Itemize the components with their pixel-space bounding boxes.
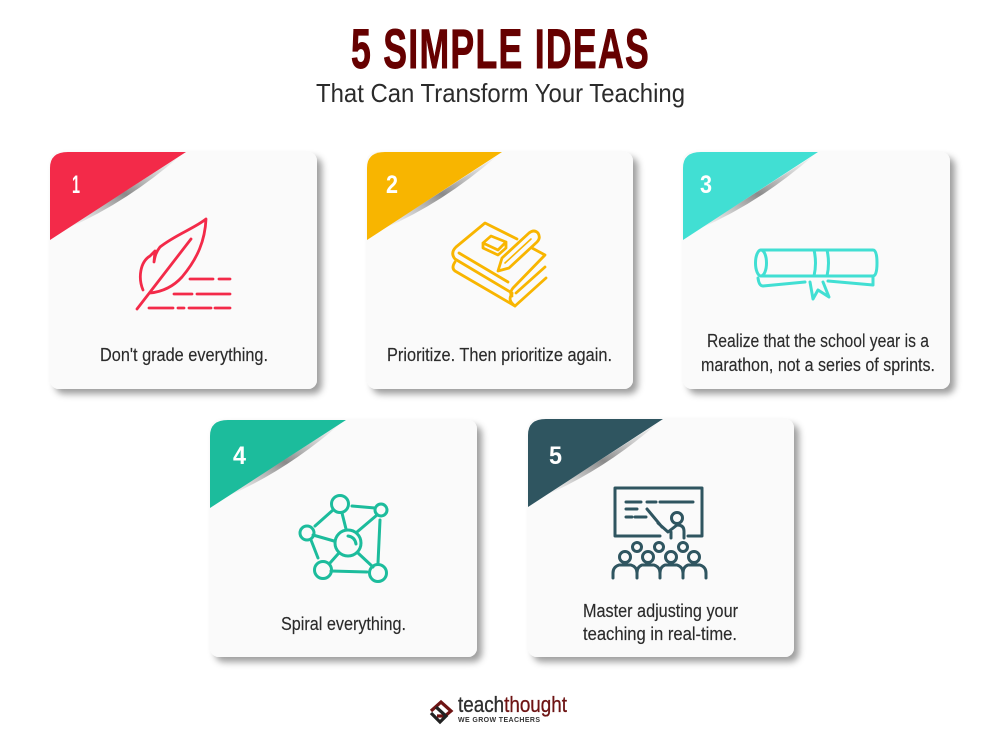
icon: network <box>300 496 387 582</box>
caption: Spiral everything. <box>281 614 406 634</box>
fold shadow <box>699 156 813 229</box>
wordmark: teachthought <box>458 692 567 717</box>
number: 2 <box>386 171 398 199</box>
number: 1 <box>72 171 80 199</box>
subtitle: That Can Transform Your Teaching <box>316 78 685 108</box>
panel: idea 1 <box>50 152 317 389</box>
number ribbon <box>210 420 346 508</box>
caption: Don't grade everything. <box>100 345 268 365</box>
caption <box>701 331 935 375</box>
number: 5 <box>549 442 562 470</box>
number ribbon <box>528 419 663 507</box>
number ribbon <box>367 152 502 240</box>
fold shadow <box>544 423 658 496</box>
panel: idea 5 <box>528 419 794 657</box>
caption: Realize that the school year is a <box>707 331 930 351</box>
tagline: WE GROW TEACHERS <box>458 717 540 724</box>
icon: books and pencil <box>453 223 546 306</box>
icon: teacher and class <box>613 488 706 578</box>
icon: logo mark <box>431 702 451 722</box>
panel: idea 4 <box>210 420 477 657</box>
number: 4 <box>233 442 246 470</box>
caption: marathon, not a series of sprints. <box>701 355 935 375</box>
number: 3 <box>700 171 712 199</box>
number ribbon <box>50 152 186 240</box>
caption: Master adjusting your <box>583 601 738 621</box>
card background <box>50 152 317 389</box>
caption <box>583 601 738 644</box>
panel: idea 3 <box>683 152 950 389</box>
card background <box>683 152 950 389</box>
fold shadow <box>226 424 340 497</box>
card background <box>210 420 477 657</box>
panel: idea 2 <box>367 152 633 389</box>
icon: diploma <box>756 250 877 299</box>
number ribbon <box>683 152 818 240</box>
title: 5 SIMPLE IDEAS <box>351 17 650 80</box>
card background <box>528 419 794 657</box>
icon: feather <box>137 219 230 309</box>
caption: teaching in real-time. <box>583 624 737 644</box>
logo: teachthought <box>431 692 567 724</box>
fold shadow <box>383 156 497 229</box>
card background <box>367 152 633 389</box>
fold shadow <box>66 156 180 229</box>
caption: Prioritize. Then prioritize again. <box>387 345 612 365</box>
